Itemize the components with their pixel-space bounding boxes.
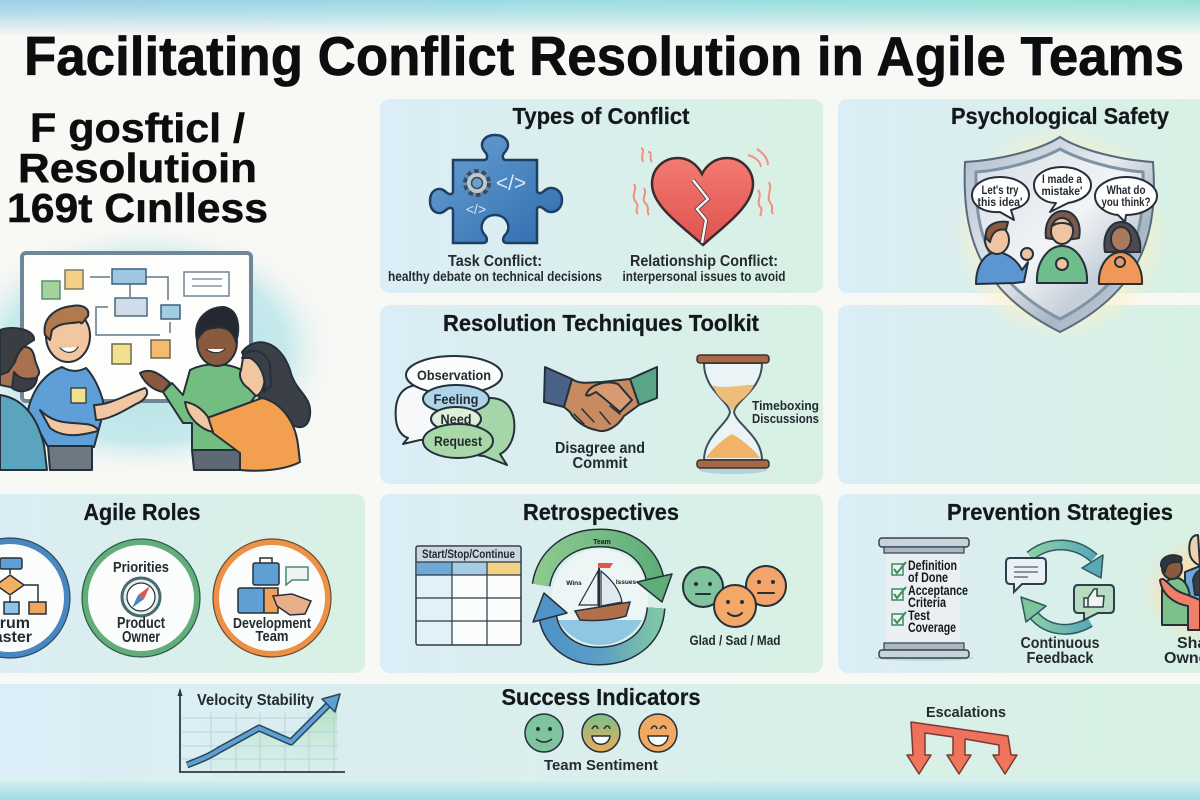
illustration: team at whiteboard	[0, 222, 340, 478]
icon: puzzle piece: </>	[466, 201, 486, 217]
heading: prevention strategies: Prevention Strategies	[947, 499, 1173, 525]
caption: relationship conflict: Relationship Conflict:	[630, 253, 778, 270]
person: bearded man	[0, 328, 47, 470]
start stop continue table: Start/Stop/Continue	[422, 547, 515, 561]
panel: types of conflict	[380, 99, 823, 293]
role: product owner	[82, 539, 200, 657]
icon: hourglass	[697, 355, 769, 474]
left heading	[7, 105, 268, 231]
person: center	[1037, 211, 1087, 283]
caption: task conflict	[388, 253, 602, 284]
speech bubbles: this idea'	[978, 195, 1023, 209]
role: product owner: Owner	[122, 629, 160, 646]
caption: timeboxing discussions	[752, 398, 819, 426]
caption: continuous feedback	[1021, 636, 1099, 663]
icon: broken heart	[634, 148, 773, 245]
checklist column: Coverage	[908, 620, 956, 635]
speech bubbles: Let's try	[982, 183, 1019, 197]
role: development team: Team	[256, 628, 288, 645]
escalations arrows: Escalations	[926, 704, 1006, 721]
chart: velocity stability	[178, 688, 345, 772]
caption: disagree and commit: Disagree and	[555, 440, 645, 457]
panel: resolution techniques toolkit	[380, 305, 823, 484]
title: Facilitating Conflict Resolution in Agile Teams	[24, 25, 1184, 87]
caption: disagree and commit	[555, 440, 645, 472]
glad sad mad faces	[683, 566, 786, 627]
heading: success indicators: Success Indicators	[502, 684, 700, 710]
continuous feedback cycle	[1006, 545, 1114, 629]
caption: timeboxing discussions: Timeboxing	[752, 398, 819, 413]
panel: empty lower right	[838, 305, 1200, 484]
heading: retrospectives: Retrospectives	[523, 499, 679, 525]
person: right	[1099, 222, 1142, 284]
heading: agile roles: Agile Roles	[84, 499, 200, 525]
speech bubbles	[972, 167, 1157, 222]
shared ownership team hug	[1148, 534, 1200, 638]
role: product owner: Product	[117, 615, 166, 632]
caption: disagree and commit: Commit	[572, 455, 628, 472]
chart: velocity stability: Velocity Stability	[197, 692, 314, 709]
icon: nonviolent communication bubbles: Observation	[417, 367, 491, 383]
checklist column: Test	[908, 608, 930, 623]
caption: continuous feedback: Feedback	[1026, 650, 1094, 667]
icon: nonviolent communication bubbles: Request	[434, 433, 482, 449]
caption: task conflict: healthy debate on technical decisions	[388, 269, 602, 284]
retrospective cycle with sailboat	[533, 538, 672, 660]
icon: nonviolent communication bubbles: Feeling	[434, 391, 478, 407]
caption: timeboxing discussions: Discussions	[752, 411, 819, 426]
panel: agile roles	[0, 494, 365, 673]
start stop continue table	[416, 546, 521, 645]
icon: puzzle piece: </>	[496, 172, 526, 195]
person: woman in orange	[185, 342, 310, 471]
speech bubbles: mistake'	[1042, 184, 1083, 198]
icon: nonviolent communication bubbles: Need	[440, 411, 472, 427]
retrospective cycle with sailboat: Wins	[566, 580, 582, 587]
heading: resolution techniques toolkit: Resolution Techniques Toolkit	[443, 310, 759, 336]
icon: handshake	[544, 367, 657, 431]
panel: retrospectives	[380, 494, 823, 673]
left heading: 169t Cınlless	[7, 185, 268, 231]
whiteboard	[22, 253, 251, 401]
role: development team: Development	[233, 615, 311, 632]
person: man in green	[140, 307, 256, 470]
heading: psychological safety: Psychological Safety	[951, 103, 1169, 129]
person: man in blue	[28, 305, 147, 470]
left heading: Resolutioin	[18, 145, 257, 191]
top gradient band	[0, 0, 1200, 36]
caption: glad sad mad: Glad / Sad / Mad	[690, 633, 780, 648]
team sentiment faces: Team Sentiment	[544, 757, 658, 774]
role: scrum master	[0, 538, 70, 658]
speech bubbles: What do	[1106, 183, 1146, 197]
checklist column	[874, 538, 974, 661]
speech bubbles: I made a	[1042, 172, 1082, 186]
caption: relationship conflict: interpersonal issues to avoid	[622, 269, 786, 284]
heading: types of conflict: Types of Conflict	[512, 103, 690, 129]
team sentiment faces	[525, 714, 677, 774]
caption: relationship conflict	[622, 253, 786, 284]
speech bubbles: you think?	[1102, 195, 1150, 209]
icon: nonviolent communication bubbles	[396, 356, 514, 465]
retrospective cycle with sailboat: Issues	[616, 579, 636, 586]
caption: task conflict: Task Conflict:	[448, 253, 542, 270]
checklist column: Definition	[908, 558, 957, 573]
caption: shared ownership	[1164, 636, 1200, 663]
panel: success indicators band	[0, 684, 1200, 800]
icon: shield with team	[952, 124, 1168, 340]
icon: puzzle piece	[430, 135, 562, 243]
retrospective cycle with sailboat: Team	[593, 539, 611, 546]
left heading: F ɡosfticl /	[30, 105, 245, 151]
escalations arrows	[907, 704, 1017, 774]
panel: psychological safety	[838, 99, 1200, 293]
person: left	[976, 222, 1033, 284]
role: product owner: Priorities	[113, 559, 169, 576]
checklist column: Acceptance	[908, 583, 968, 598]
role: development team	[213, 539, 331, 657]
checklist column: Criteria	[908, 595, 946, 610]
caption: continuous feedback: Continuous	[1020, 635, 1100, 652]
checklist column: of Done	[908, 570, 948, 585]
panel: prevention strategies	[838, 494, 1200, 673]
